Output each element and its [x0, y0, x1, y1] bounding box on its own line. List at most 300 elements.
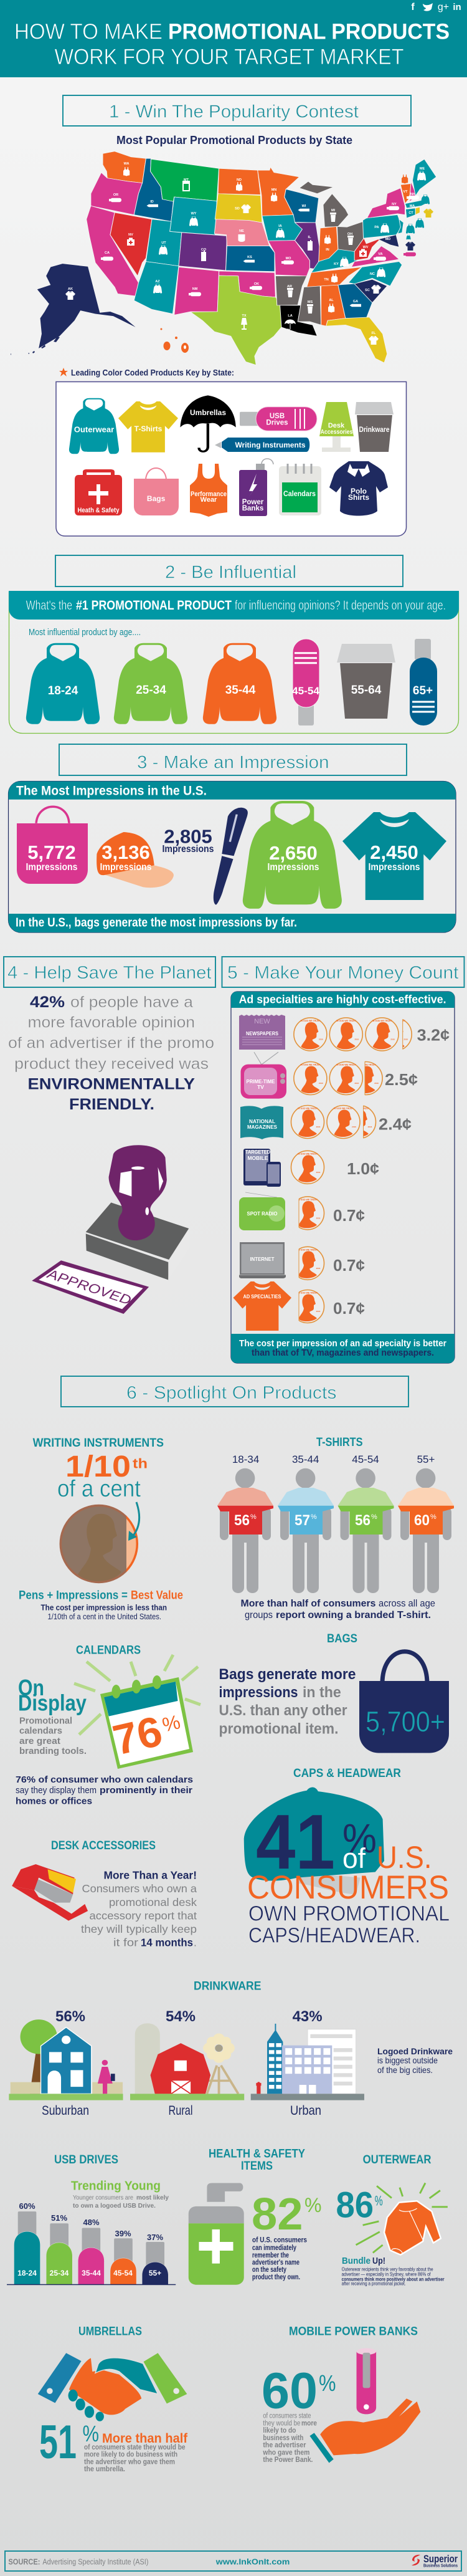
caption: 76% of consumer who own calendars [16, 1774, 193, 1785]
panel footer: The cost per impression of an ad specialty is better [239, 1338, 446, 1349]
caption: Pens + Impressions = [19, 1589, 128, 1602]
state abbreviations: MS [308, 300, 313, 304]
figure 18-34: 56 [234, 1512, 250, 1529]
key: outerwear: Outerwear [74, 425, 114, 434]
text: environmentally friendly stat: FRIENDLY. [69, 1096, 154, 1113]
row: spot radio 0.7 cents: 0.7¢ [333, 1206, 365, 1225]
title text: PROMOTIONAL PRODUCTS [168, 20, 450, 44]
rays [74, 1655, 200, 1735]
block: health and safety [189, 2148, 321, 2285]
stat: 41% of U.S. consumers: CONSUMERS [247, 1869, 449, 1906]
text: environmentally friendly stat: of people have a [70, 994, 193, 1011]
title text: HOW TO MAKE [14, 20, 163, 44]
block: bags [219, 1632, 449, 1753]
row: ad specialties 0.7 cents: AD SPECIALTIES [243, 1293, 281, 1300]
text: Bundle [342, 2256, 370, 2266]
section heading 4 [4, 957, 215, 987]
icon: stapler [12, 1864, 88, 1921]
text: of consumers state they would be [84, 2443, 186, 2451]
state abbreviations: AL [329, 299, 334, 302]
text: environmentally friendly stat: of an advertiser if the promo [8, 1035, 214, 1052]
map: US states by leading product [11, 151, 436, 365]
text: advertiser's name [252, 2259, 300, 2266]
text: on display: Promotional [19, 1716, 72, 1726]
state abbreviations: AZ [155, 280, 160, 284]
caption [240, 1598, 435, 1621]
text [81, 1869, 197, 1949]
state abbreviations: NY [392, 203, 397, 206]
icon: bag 5,700+: 5,700+ [366, 1705, 445, 1738]
statement: impressions [219, 1684, 298, 1701]
state abbreviations: KY [334, 262, 339, 266]
figure 55+ [398, 1453, 454, 1593]
figure 35-44 [278, 1453, 334, 1593]
pen 2,805 [162, 808, 248, 905]
state abbreviations: MI [331, 209, 336, 213]
panel header: The Most Impressions in the U.S. [16, 784, 207, 798]
state abbreviations: PA [374, 226, 379, 229]
icon: cap [244, 1788, 384, 1894]
section heading 1: 1 - Win The Popularity Contest [109, 102, 359, 122]
row: prime-time TV 2.5 cents: 2.5¢ [385, 1070, 418, 1089]
key: USB drives: Drives [266, 419, 288, 426]
stat: 41% of U.S. consumers: % [342, 1815, 377, 1861]
title text [14, 20, 450, 69]
state abbreviations: NE [239, 229, 244, 233]
key: power banks [239, 459, 273, 516]
key: health and safety: Heath & Safety [77, 507, 120, 514]
state abbreviations: WA [124, 162, 129, 166]
scene: urban 43% [251, 2008, 364, 2118]
text: environmentally friendly stat: product they received was [14, 1055, 209, 1073]
panel: colour key [56, 381, 406, 536]
stat 82%: 82 [252, 2190, 303, 2239]
block: umbrellas [38, 2325, 188, 2473]
stat: 41% of U.S. consumers: of [342, 1842, 366, 1874]
key: writing instruments: Writing Instruments [235, 441, 306, 449]
age 65+ USB: 65+ [413, 684, 433, 697]
stat 60%: 60 [262, 2363, 318, 2420]
key: umbrellas [180, 395, 236, 451]
panel: cost per impression [231, 992, 455, 1363]
state abbreviations: LA [288, 314, 293, 318]
text: on display [18, 1675, 87, 1756]
age 18-24 hoodie [26, 643, 100, 724]
stat: 41% of U.S. consumers: OWN PROMOTIONAL [248, 1902, 450, 1926]
state abbreviations: WI [302, 204, 306, 208]
row: targeted mobile 1.0 cent [243, 1149, 379, 1187]
state abbreviations: NC [370, 272, 375, 276]
state abbreviations: OH [347, 232, 352, 236]
key: USB drives: USB [270, 413, 285, 420]
bag 5,772 [17, 807, 88, 884]
stat: 1/10th of a cent: of a cent [57, 1476, 141, 1502]
key: bags: Bags [147, 494, 166, 503]
key: power banks: Power [242, 499, 264, 506]
panel: most impressions [9, 782, 456, 932]
pen 2,805: 2,805 [164, 826, 212, 848]
bag 5,772: Impressions [26, 862, 77, 873]
figure 45-54 [337, 1453, 394, 1593]
block: USB drives [7, 2153, 176, 2285]
caption: The cost per impression is less than [41, 1603, 167, 1612]
row: internet 0.7 cents: 0.7¢ [333, 1256, 365, 1275]
text: product they own. [252, 2274, 300, 2281]
row: internet 0.7 cents [239, 1242, 365, 1280]
state abbreviations: GA [353, 300, 358, 304]
hoodie 2,650 [243, 801, 342, 909]
note: of the big cities. [377, 2065, 433, 2075]
icons: social links: g+ [438, 2, 449, 12]
text: the advertiser who gave them [84, 2457, 175, 2466]
small-state icons offshore [402, 175, 433, 256]
text: Outerwear recipients think very favorably about the [342, 2267, 433, 2272]
state abbreviations: ND [237, 178, 242, 182]
section heading 3: 3 - Make an Impression [137, 753, 329, 773]
stat 51% [39, 2416, 188, 2469]
text [252, 2236, 307, 2281]
text: environmentally friendly stat: more favorable opinion [27, 1014, 195, 1032]
stat: 1/10th of a cent: 1/10 [65, 1450, 131, 1483]
note: Trending Young [71, 2179, 161, 2193]
scene: rural 54% [130, 2008, 244, 2118]
key: bags [134, 468, 179, 515]
row: targeted mobile 1.0 cent: TARGETED [245, 1149, 270, 1155]
text: the advertiser [263, 2442, 306, 2449]
chart: USB ownership by age: 39% [115, 2229, 131, 2238]
row: ad specialties 0.7 cents [233, 1281, 365, 1331]
heading: CALENDARS [76, 1644, 141, 1657]
section heading 6: 6 - Spotlight On Products [126, 1383, 336, 1403]
state abbreviations: ME [420, 167, 425, 171]
icon: calendar 76% [100, 1675, 193, 1769]
cap 3,136 [97, 832, 174, 888]
hoodie 2,650: 2,650 [269, 842, 318, 864]
age 45-54 USB [292, 639, 320, 725]
row: national magazines 2.4 cents: 2.4¢ [379, 1114, 412, 1133]
banner question: What's the [26, 598, 72, 613]
row: newspapers 3.2 cents: NEWSPAPERS [246, 1030, 278, 1037]
text: they would be [263, 2420, 300, 2427]
stat: 41% of U.S. consumers [247, 1799, 450, 1947]
key: t-shirts [118, 401, 178, 452]
scene: urban 43%: Urban [290, 2104, 321, 2118]
text: the umbrella. [84, 2464, 125, 2473]
caption: across all age [379, 1598, 435, 1609]
block: mobile power banks [262, 2325, 420, 2464]
source [8, 2558, 148, 2567]
key: performance wear [190, 464, 227, 517]
t-shirt 2,450: Impressions [369, 862, 420, 873]
heading: WRITING INSTRUMENTS [33, 1437, 164, 1450]
panel header [9, 782, 456, 800]
text: environmentally friendly stat: 42% [30, 994, 65, 1011]
title banner [0, 0, 467, 77]
icons: social links [411, 2, 461, 12]
key: desk accessories: Desk [328, 422, 345, 429]
stat 86%: 86 [336, 2185, 374, 2226]
row: prime-time TV 2.5 cents: PRIME-TIME [247, 1078, 275, 1085]
row: internet 0.7 cents: INTERNET [250, 1256, 275, 1262]
row: newspapers 3.2 cents: NEW [254, 1018, 270, 1025]
statement: promotional item. [219, 1721, 339, 1738]
stat 51%: 51 [39, 2416, 77, 2469]
age 45-54 USB: 45-54 [292, 685, 320, 697]
panel header: Ad specialties are highly cost-effective. [239, 993, 446, 1005]
scene: suburban 56% [9, 2008, 123, 2118]
statement: U.S. than any other [219, 1702, 347, 1719]
text: More Than a Year! [103, 1869, 197, 1882]
row: prime-time TV 2.5 cents [240, 1052, 418, 1099]
footer: source and branding [5, 2551, 461, 2571]
figure 18-34: % [250, 1513, 257, 1521]
key: desk accessories: Accessories [320, 429, 353, 436]
scene: suburban 56%: 56% [55, 2008, 85, 2025]
text: of U.S. consumers [252, 2236, 307, 2244]
block: caps and headwear [244, 1767, 450, 1947]
figure 55+: 60 [414, 1512, 430, 1529]
title text: WORK FOR YOUR TARGET MARKET [55, 45, 403, 69]
text: remember the [252, 2252, 289, 2259]
key: calendars: Calendars [283, 489, 316, 498]
heading: MOBILE POWER BANKS [289, 2325, 418, 2338]
scene: rural 54%: 54% [166, 2008, 196, 2025]
state abbreviations: AR [287, 285, 292, 289]
state abbreviations: VA [378, 252, 383, 256]
caption: groups [245, 1610, 273, 1621]
age 65+ USB [410, 639, 437, 725]
state abbreviations: CO [201, 248, 207, 252]
key: health and safety [75, 469, 122, 515]
icon: bag 5,700+ [359, 1652, 449, 1753]
heading: CAPS & HEADWEAR [293, 1767, 401, 1780]
text: on display: On [18, 1675, 44, 1700]
figure 35-44: 35-44 [292, 1453, 319, 1465]
key: USB drives [240, 407, 317, 431]
stat 60%: % [319, 2370, 336, 2396]
figure 55+: 55+ [417, 1453, 435, 1465]
icon: hand holding power bank [309, 2349, 420, 2463]
heading: OUTERWEAR [363, 2153, 432, 2167]
state abbreviations: VT [403, 190, 408, 194]
chart: USB ownership by age: 45-54 [113, 2269, 133, 2277]
block: outerwear [336, 2153, 448, 2287]
age 55-64 cup: 55-64 [351, 684, 382, 697]
state abbreviations: MT [184, 178, 189, 182]
icon: handshake [38, 2353, 187, 2421]
state abbreviations: NH [410, 193, 415, 196]
state abbreviations: WV [363, 246, 369, 249]
row: ad specialties 0.7 cents: 0.7¢ [333, 1299, 365, 1318]
heading: UMBRELLAS [78, 2325, 142, 2338]
state abbreviations: IA [278, 224, 282, 228]
state abbreviations: MN [271, 188, 276, 192]
panel footer [9, 914, 456, 932]
logo: Superior [423, 2553, 458, 2565]
panel: influence by age [9, 591, 459, 733]
state abbreviations: TN [324, 278, 329, 282]
icon: approved rubber stamp [32, 1145, 189, 1314]
heading: DESK ACCESSORIES [51, 1839, 156, 1852]
row: targeted mobile 1.0 cent: MOBILE [247, 1155, 268, 1161]
text [342, 2256, 445, 2287]
stat: 41% of U.S. consumers: U.S. [377, 1840, 432, 1875]
source: SOURCE: [8, 2558, 40, 2567]
hoodie 2,650: Impressions [268, 862, 319, 873]
row: spot radio 0.7 cents [239, 1192, 365, 1230]
text: business with [263, 2435, 303, 2442]
chart: USB ownership by age: 51% [51, 2213, 67, 2223]
text: on display: branding tools. [19, 1746, 87, 1756]
state abbreviations: MO [286, 257, 291, 261]
text: 14 months [141, 1937, 193, 1949]
row: national magazines 2.4 cents: NATIONAL [249, 1118, 275, 1124]
stat: 1/10th of a cent [57, 1450, 148, 1502]
state abbreviations [68, 162, 425, 335]
text: on display: Display [18, 1690, 87, 1716]
figure 45-54: 45-54 [352, 1453, 379, 1465]
figure 18-34: 18-34 [232, 1453, 259, 1465]
logo: Business Solutions [423, 2563, 458, 2568]
text: of consumers state [263, 2412, 311, 2420]
stat 82%: % [304, 2194, 321, 2216]
pen 2,805: Impressions [162, 844, 214, 855]
scene: suburban 56%: Suburban [42, 2104, 89, 2118]
state abbreviations: WY [191, 212, 197, 216]
text: on the safety [252, 2266, 286, 2274]
scene: rural 54%: Rural [168, 2104, 193, 2118]
stat: 41% of U.S. consumers: CAPS/HEADWEAR. [248, 1923, 420, 1947]
block: t-shirts [217, 1436, 454, 1621]
key: polo shirts: Shirts [348, 493, 369, 502]
figure 45-54: % [371, 1513, 377, 1521]
text: environmentally friendly stat [8, 994, 214, 1113]
row: spot radio 0.7 cents: SPOT RADIO [247, 1210, 278, 1217]
caption [16, 1774, 193, 1807]
panel footer: than that of TV, magazines and newspapers. [252, 1348, 434, 1358]
text: who gave them [262, 2449, 309, 2457]
section heading 3 [59, 744, 407, 775]
note [71, 2179, 169, 2210]
state abbreviations: UT [161, 241, 166, 245]
state abbreviations: TX [242, 314, 247, 318]
panel footer: In the U.S., bags generate the most impressions by far. [16, 916, 297, 930]
heading: DRINKWARE [194, 1980, 262, 1993]
banner question [9, 591, 459, 620]
text [262, 2412, 317, 2464]
caption: More than half of consumers [240, 1598, 376, 1609]
section heading 2: 2 - Be Influential [165, 563, 296, 583]
key: calendars [279, 464, 321, 515]
source: Advertising Specialty Institute (ASI) [42, 2558, 148, 2567]
heading: ITEMS [241, 2160, 273, 2173]
figure 18-34 [217, 1453, 273, 1593]
caption: Best Value [131, 1589, 183, 1602]
banner question: #1 PROMOTIONAL PRODUCT [76, 598, 232, 613]
logo [412, 2553, 458, 2568]
state abbreviations: SD [235, 207, 240, 211]
note: to own a logoed USB Drive. [73, 2202, 156, 2210]
heading [209, 2148, 305, 2173]
caption: Most influential product by age.... [29, 627, 141, 638]
age 25-34 hoodie [114, 643, 187, 724]
text: it for [113, 1937, 138, 1949]
key: umbrellas: Umbrellas [190, 408, 226, 417]
section heading 5: 5 - Make Your Money Count [227, 963, 458, 983]
state abbreviations: NV [128, 233, 133, 237]
map heading: Most Popular Promotional Products by State [116, 134, 352, 146]
state abbreviations: ID [150, 200, 154, 204]
state abbreviations: MD [385, 237, 390, 241]
text: consumers think more positively about an advertiser [342, 2276, 445, 2282]
text: advertiser — especially in Sydney, where 86% of [342, 2271, 431, 2277]
section heading 2 [55, 555, 403, 587]
block: desk accessories [12, 1839, 197, 1949]
key: t-shirts: T-Shirts [134, 424, 163, 433]
key: performance wear: Performance [191, 491, 227, 498]
chart: USB ownership by age: 25-34 [50, 2269, 69, 2277]
icon: penny with slice [60, 1506, 137, 1582]
figure 55+: % [430, 1513, 436, 1521]
state abbreviations: IN [326, 248, 329, 252]
icon: calendar 76%: 76 [108, 1707, 167, 1764]
state abbreviations: CA [105, 251, 110, 255]
Hawaii and Aleutian islands [11, 328, 189, 355]
block: calendars [16, 1644, 200, 1807]
text: likely to do [263, 2427, 296, 2435]
state abbreviations: KS [247, 256, 252, 259]
caption: say they display them [16, 1785, 97, 1796]
block: drinkware [9, 1980, 453, 2118]
row: national magazines 2.4 cents: MAGAZINES [247, 1124, 277, 1130]
statement [219, 1666, 356, 1738]
row: newspapers 3.2 cents [239, 1015, 450, 1051]
stat 51%: % [82, 2421, 99, 2446]
text: promotional desk [109, 1896, 197, 1908]
state abbreviations: OK [254, 282, 259, 286]
section heading 4: 4 - Help Save The Planet [7, 963, 212, 983]
state abbreviations: CT [408, 211, 413, 215]
icons: social links: f [411, 2, 415, 12]
statement: in the [303, 1684, 341, 1701]
state abbreviations: FL [372, 332, 376, 335]
heading: HEALTH & SAFETY [209, 2148, 305, 2161]
scene: urban 43%: 43% [293, 2008, 323, 2025]
key: writing instruments [215, 438, 309, 452]
caption: prominently in their [100, 1785, 192, 1796]
key: performance wear: Wear [200, 496, 217, 504]
age 55-64 cup [337, 644, 395, 719]
chart: USB ownership by age: 18-24 [17, 2269, 37, 2277]
caption: 1/10th of a cent in the United States. [47, 1612, 161, 1621]
row: prime-time TV 2.5 cents: TV [257, 1084, 264, 1090]
icon: approved rubber stamp: APPROVED [44, 1266, 133, 1308]
icon: calendar 76%: % [160, 1710, 182, 1736]
text: after receiving a promotional jacket. [342, 2281, 406, 2287]
note: is biggest outside [377, 2056, 438, 2066]
key: drinkware [355, 402, 394, 452]
website: www.InkOnIt.com [215, 2557, 290, 2567]
state abbreviations: IL [308, 236, 311, 239]
text: Up! [372, 2256, 385, 2266]
key: polo shirts: Polo [351, 487, 367, 496]
note [377, 2046, 453, 2075]
note: most likely [136, 2194, 169, 2201]
text: accessory report that [90, 1910, 197, 1922]
age 35-44 hoodie: 35-44 [225, 684, 256, 697]
chart: USB ownership by age: 55+ [149, 2269, 161, 2277]
icons: social links: in [453, 2, 461, 12]
